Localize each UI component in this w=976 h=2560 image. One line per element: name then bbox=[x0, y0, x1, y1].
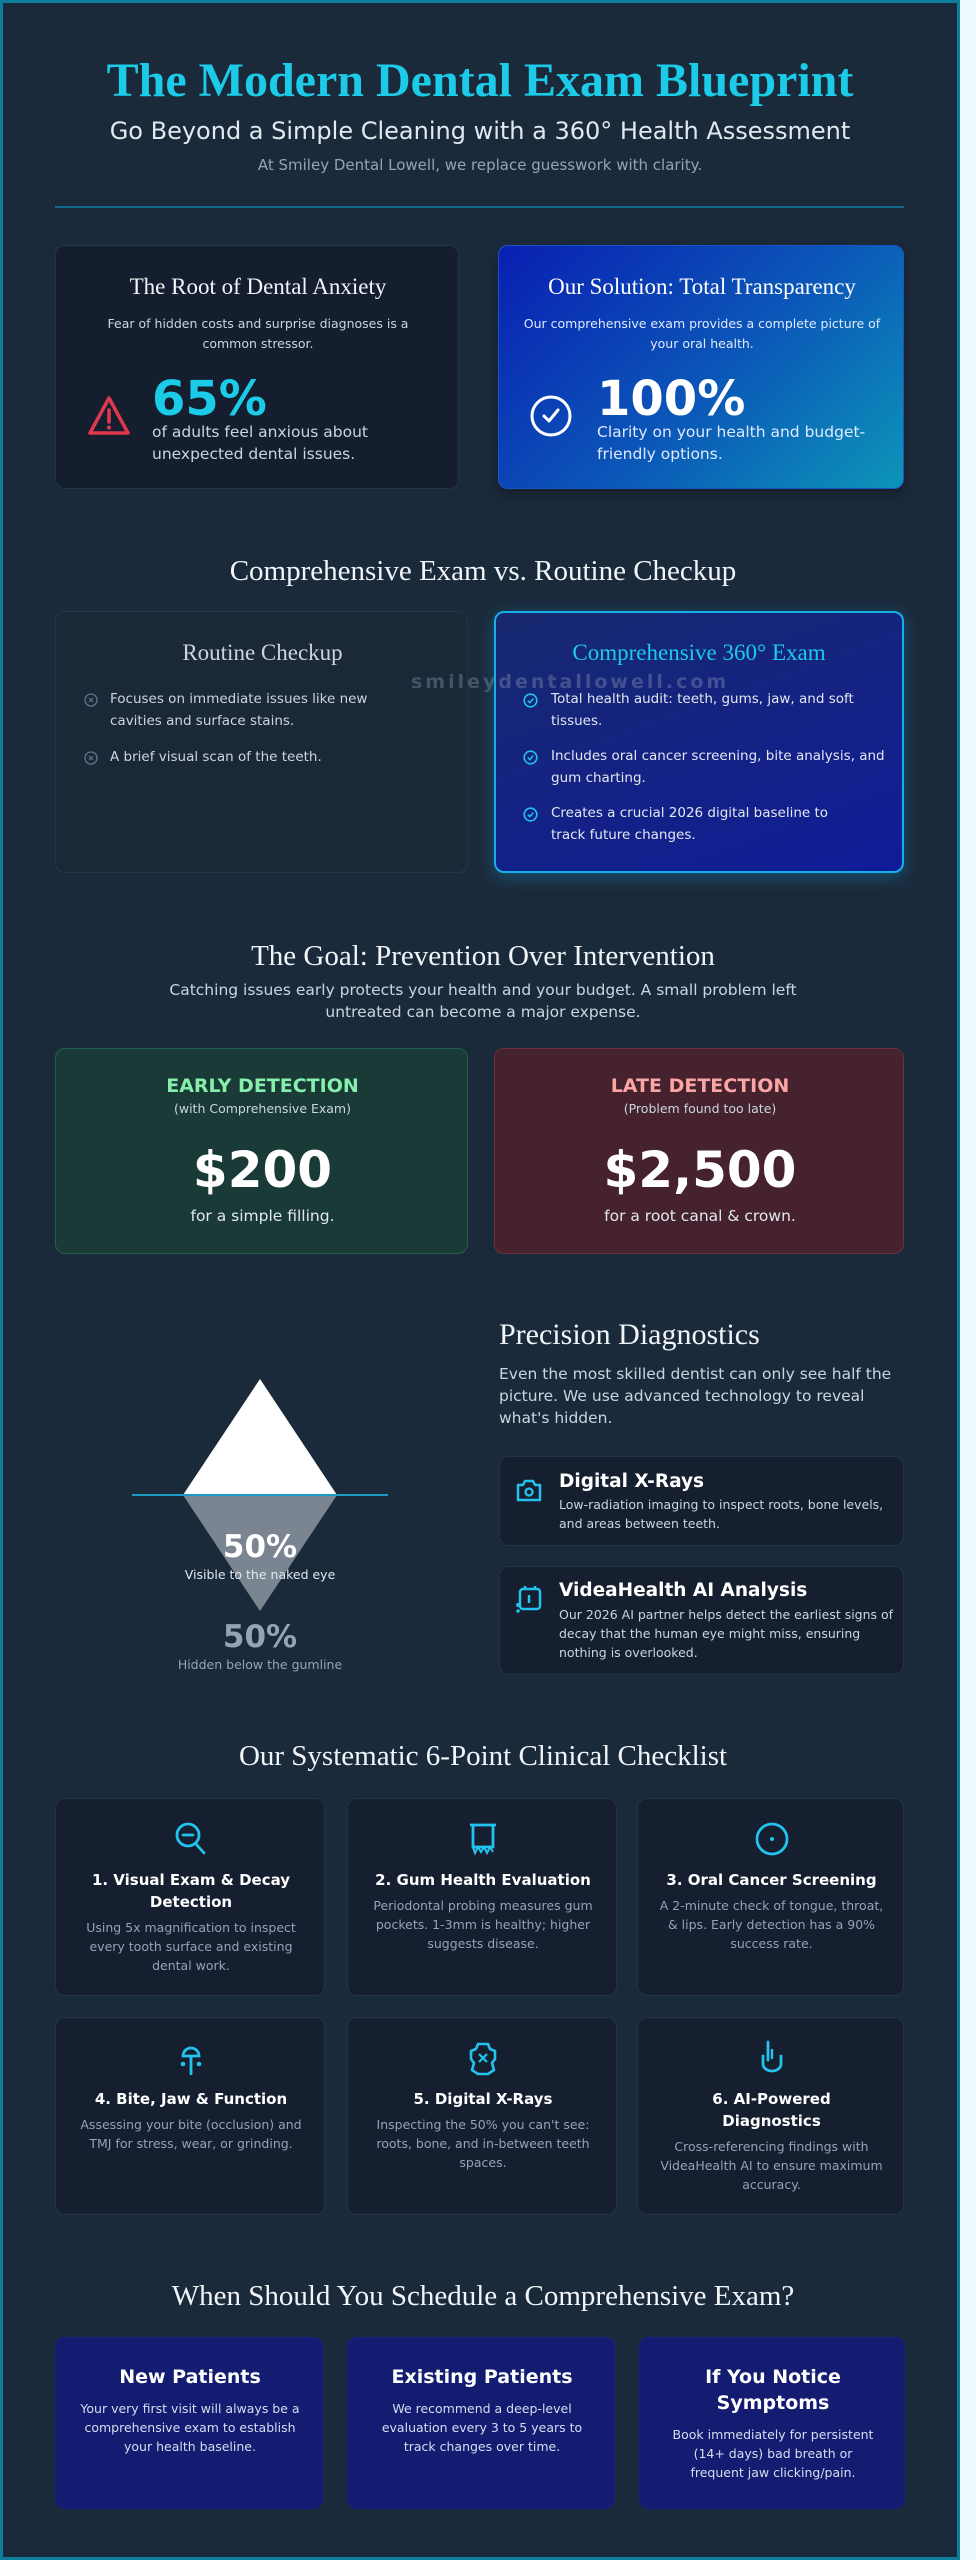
icon: check circle bbox=[530, 396, 572, 436]
text: stat caption: of adults feel anxious about unexpected dental issues. bbox=[152, 423, 368, 463]
text: prevention description: Catching issues early protects your health and your budget. A small problem left untreated can become a major expense. bbox=[169, 981, 797, 1021]
list: routine items bbox=[84, 691, 367, 765]
panel: checklist 1 bbox=[55, 1798, 325, 1996]
text: AI title: VideaHealth AI Analysis bbox=[559, 1580, 807, 1601]
tagline: At Smiley Dental Lowell, we replace guesswork with clarity. bbox=[258, 156, 702, 174]
panel: checklist 4: Assessing your bite (occlusion) and TMJ for stress, wear, or grinding. bbox=[80, 2117, 302, 2151]
subtitle: Go Beyond a Simple Cleaning with a 360° Health Assessment bbox=[110, 117, 850, 145]
heading: root of anxiety: The Root of Dental Anxiety bbox=[130, 274, 386, 299]
icon: AI device bbox=[516, 1586, 542, 1613]
icon: gum bbox=[470, 1824, 496, 1856]
panel: comprehensive 360 exam bbox=[494, 611, 904, 873]
list: comprehensive items: Creates a crucial 2026 digital baseline to track future changes. bbox=[551, 805, 828, 843]
heading: precision diagnostics: Precision Diagnostics bbox=[499, 1318, 760, 1351]
list: comprehensive items bbox=[523, 691, 885, 843]
panel: early detection: (with Comprehensive Exam) bbox=[174, 1101, 351, 1116]
panel: existing patients: We recommend a deep-level evaluation every 3 to 5 years to track changes over time. bbox=[382, 2401, 582, 2454]
label: early: EARLY DETECTION bbox=[166, 1075, 359, 1097]
panel: late detection: (Problem found too late) bbox=[624, 1101, 776, 1116]
icon: camera bbox=[516, 1480, 542, 1502]
label: late: LATE DETECTION bbox=[611, 1075, 789, 1097]
panel: symptoms: If You Notice Symptoms bbox=[705, 2366, 841, 2414]
panel: checklist 3: A 2-minute check of tongue, throat, & lips. Early detection has a 90% success rate. bbox=[660, 1898, 883, 1951]
panel: checklist 1: Using 5x magnification to inspect every tooth surface and existing dental work. bbox=[86, 1920, 296, 1973]
watermark: smileydentallowell.com bbox=[411, 671, 729, 693]
panel: checklist 4: 4. Bite, Jaw & Function bbox=[95, 2090, 287, 2108]
panel: AI analysis bbox=[499, 1566, 904, 1675]
panel: early detection: for a simple filling. bbox=[190, 1207, 335, 1225]
panel: checklist 3 bbox=[637, 1798, 904, 1996]
list: comprehensive items: Total health audit: teeth, gums, jaw, and soft tissues. bbox=[551, 691, 854, 729]
text: stat caption: Clarity on your health and budget-friendly options. bbox=[597, 423, 865, 463]
heading: prevention: The Goal: Prevention Over Intervention bbox=[251, 940, 715, 972]
panel: symptoms bbox=[639, 2337, 905, 2509]
panel: late detection: for a root canal & crown. bbox=[604, 1207, 796, 1225]
stat: 100%: 100% bbox=[597, 371, 745, 427]
panel: checklist 5: 5. Digital X-Rays bbox=[414, 2090, 552, 2108]
icon: magnifier bbox=[176, 1822, 206, 1854]
panel: checklist 2: Periodontal probing measures gum pockets. 1-3mm is healthy; higher suggests disease. bbox=[373, 1898, 593, 1951]
panel: checklist 1: 1. Visual Exam & Decay Detection bbox=[92, 1871, 290, 1911]
panel: AI analysis: Our 2026 AI partner helps detect the earliest signs of decay that the human eye might miss, ensuring nothing is overlooked. bbox=[559, 1607, 893, 1660]
panel: symptoms: Book immediately for persistent (14+ days) bad breath or frequent jaw clicking/pain. bbox=[673, 2427, 873, 2480]
panel: total transparency bbox=[498, 245, 904, 489]
panel: checklist 2 bbox=[347, 1798, 617, 1996]
panel: checklist 2: 2. Gum Health Evaluation bbox=[375, 1871, 591, 1889]
text: diagnostics description: Even the most skilled dentist can only see half the picture. We use advanced technology to reveal what's hidden. bbox=[499, 1365, 891, 1427]
heading: comparison: Comprehensive Exam vs. Routine Checkup bbox=[230, 555, 736, 587]
text: anxiety description: Fear of hidden costs and surprise diagnoses is a common stressor. bbox=[108, 316, 408, 351]
panel: new patients: New Patients bbox=[119, 2366, 261, 2388]
list: routine items: A brief visual scan of the teeth. bbox=[110, 749, 322, 765]
chart: iceberg tooth: Hidden below the gumline bbox=[178, 1657, 342, 1672]
label: visible: 50% bbox=[223, 1529, 297, 1565]
panel: checklist 6 bbox=[637, 2017, 904, 2215]
chart: iceberg tooth: Visible to the naked eye bbox=[185, 1567, 335, 1582]
icon: jaw bbox=[180, 2046, 202, 2075]
panel: checklist 6: 6. AI-Powered Diagnostics bbox=[712, 2090, 831, 2130]
heading: checklist: Our Systematic 6-Point Clinical Checklist bbox=[239, 1740, 727, 1772]
list: routine items: Focuses on immediate issues like new cavities and surface stains. bbox=[110, 691, 367, 729]
stat: $200: $200 bbox=[193, 1141, 332, 1199]
list: comprehensive items: Includes oral cancer screening, bite analysis, and gum charting. bbox=[551, 748, 885, 786]
heading: comprehensive: Comprehensive 360° Exam bbox=[572, 640, 826, 665]
heading: when to schedule: When Should You Schedule a Comprehensive Exam? bbox=[172, 2280, 794, 2312]
panel: routine checkup bbox=[55, 611, 468, 873]
text: solution description: Our comprehensive exam provides a complete picture of your oral health. bbox=[524, 316, 880, 351]
chart: iceberg tooth bbox=[132, 1379, 388, 1672]
panel: checklist 5: Inspecting the 50% you can't see: roots, bone, and in-between teeth spaces. bbox=[376, 2117, 590, 2170]
stat: $2,500: $2,500 bbox=[604, 1141, 796, 1199]
panel: new patients bbox=[55, 2337, 323, 2509]
panel: checklist 4 bbox=[55, 2017, 325, 2215]
icon: target circle bbox=[756, 1822, 788, 1856]
panel: existing patients: Existing Patients bbox=[391, 2366, 573, 2388]
heading: solution: Our Solution: Total Transparency bbox=[548, 274, 856, 299]
panel: late detection bbox=[494, 1048, 904, 1254]
panel: digital x-rays: Low-radiation imaging to inspect roots, bone levels, and areas between teeth. bbox=[559, 1497, 883, 1531]
panel: existing patients bbox=[347, 2337, 615, 2509]
stat: 65%: 65% bbox=[152, 371, 267, 427]
icon: x-ray tooth bbox=[470, 2042, 496, 2076]
panel: digital x-rays bbox=[499, 1456, 904, 1546]
panel: checklist 5 bbox=[347, 2017, 617, 2215]
icon: warning bbox=[88, 396, 130, 435]
panel: early detection bbox=[55, 1048, 468, 1254]
panel: checklist 6: Cross-referencing findings with VideaHealth AI to ensure maximum accuracy. bbox=[660, 2139, 883, 2192]
text: x-ray title: Digital X-Rays bbox=[559, 1471, 704, 1492]
label: hidden: 50% bbox=[223, 1619, 297, 1655]
title: The Modern Dental Exam Blueprint bbox=[107, 54, 853, 107]
icon: touch hand bbox=[762, 2040, 782, 2072]
panel: checklist 3: 3. Oral Cancer Screening bbox=[666, 1871, 877, 1889]
heading: routine: Routine Checkup bbox=[182, 640, 343, 665]
panel: new patients: Your very first visit will always be a comprehensive exam to establish your health baseline. bbox=[80, 2401, 300, 2454]
panel: dental anxiety bbox=[55, 245, 459, 489]
